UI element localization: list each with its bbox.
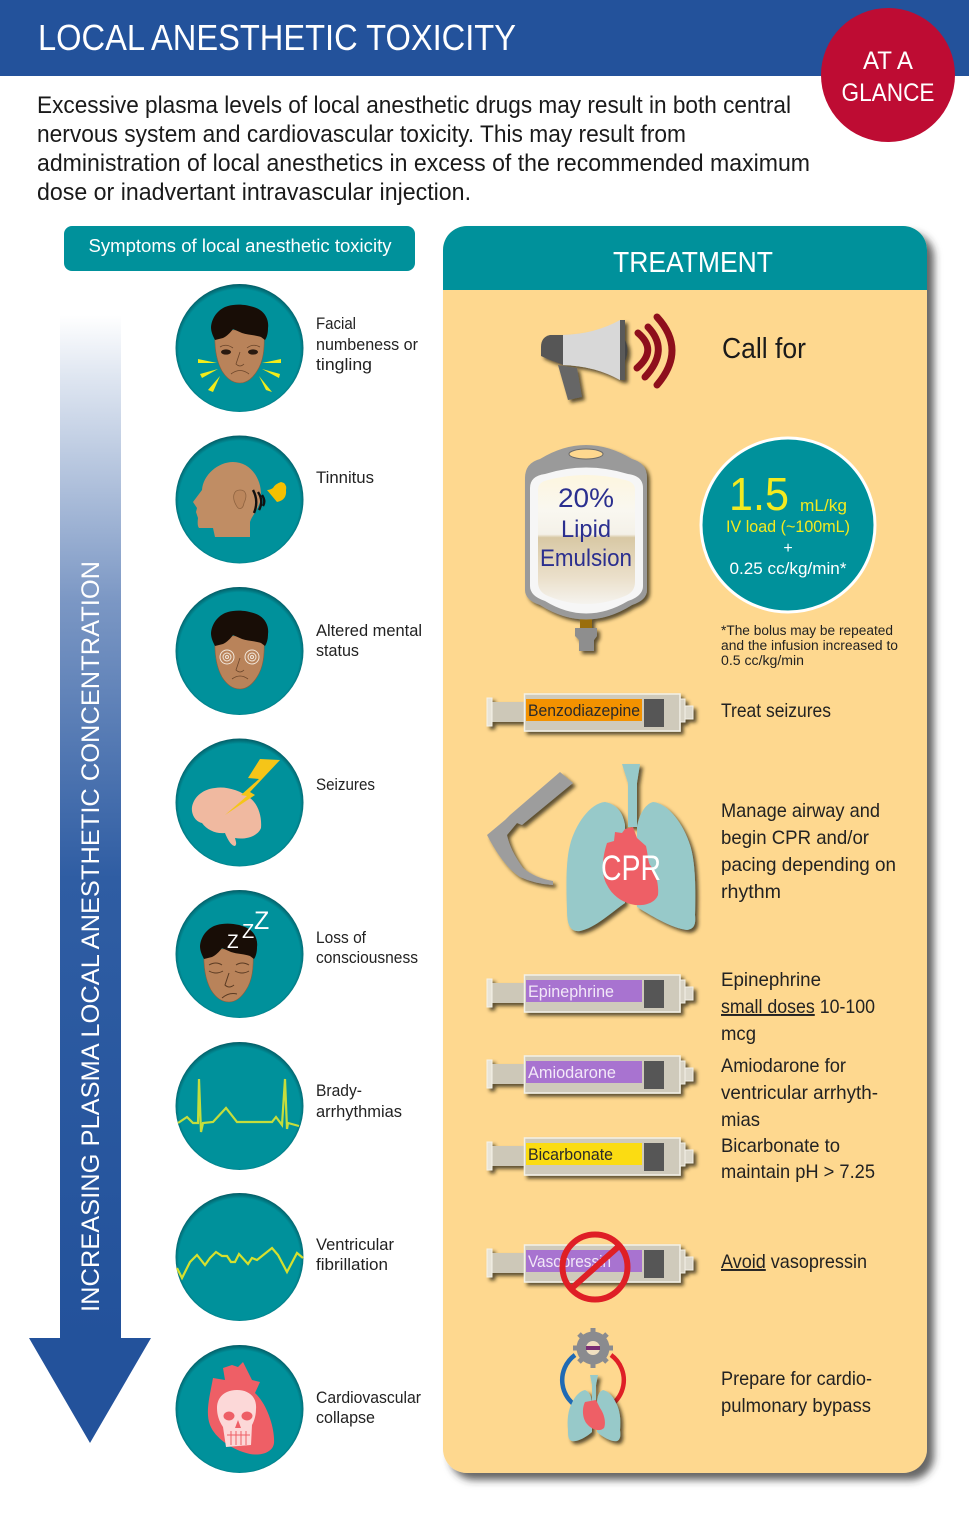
text: airway and CPR: pacing depending on [721, 854, 896, 876]
label: cardiovascular collapse [316, 1389, 421, 1427]
syringe: amiodarone: Amiodarone [528, 1063, 616, 1082]
text: airway and CPR: rhythm [721, 881, 781, 903]
syringe: epinephrine [487, 975, 693, 1012]
text: airway and CPR: begin CPR and/or [721, 827, 869, 849]
bag label: 20% [558, 483, 614, 513]
icon: head with ringing bell [193, 462, 286, 537]
text: epinephrine [721, 969, 875, 1045]
text: bicarbonate: maintain pH > 7.25 [721, 1161, 875, 1183]
callout: lipid dose: IV load (~100mL) [726, 517, 850, 536]
icon: z letters: Z [254, 907, 269, 935]
label: altered mental status: Altered mental [316, 622, 422, 640]
label: bradyarrhythmias: Brady- [316, 1082, 362, 1100]
text: epinephrine: mcg [721, 1023, 756, 1045]
symptom: cardiovascular collapse [176, 1345, 304, 1473]
badge: at a glance: AT A [863, 47, 913, 75]
text: bicarbonate [721, 1135, 875, 1183]
label: cardiovascular collapse: Cardiovascular [316, 1389, 421, 1407]
text: amiodarone: ventricular arrhyth- [721, 1082, 878, 1104]
callout: lipid dose: + [783, 540, 793, 557]
title: LOCAL ANESTHETIC TOXICITY [38, 17, 516, 58]
footnote: *The bolus may be repeated [721, 623, 893, 638]
text: bicarbonate: Bicarbonate to [721, 1135, 840, 1157]
label: tinnitus: Tinnitus [316, 469, 374, 487]
label: loss of consciousness [316, 929, 418, 967]
bag label: Lipid [561, 516, 611, 543]
syringe: epinephrine: Epinephrine [528, 982, 614, 1001]
bag label: Emulsion [540, 545, 632, 572]
syringe: vasopressin crossed out [487, 1234, 693, 1300]
arrow: increasing plasma concentration: INCREASING PLASMA LOCAL ANESTHETIC CONCENTRATION [77, 561, 105, 1312]
text: call for: Call for [722, 333, 806, 365]
icon: lungs with heart, CPR: CPR [601, 849, 661, 888]
label: facial numbness: Facial [316, 315, 356, 333]
label: ventricular fibrillation: fibrillation [316, 1256, 388, 1274]
icon: cardiopulmonary bypass [562, 1328, 624, 1441]
icon: z letters: Z [242, 921, 254, 943]
label: cardiovascular collapse: collapse [316, 1409, 375, 1427]
intro paragraph: nervous system and cardiovascular toxicity. This may result from [37, 121, 686, 148]
label: facial numbness [316, 315, 418, 374]
text: airway and CPR [721, 800, 896, 903]
footnote [721, 623, 898, 668]
label: seizures: Seizures [316, 776, 375, 794]
symptom: altered mental status [176, 587, 304, 715]
icon: laryngoscope [487, 772, 573, 885]
callout: lipid dose: 1.5 [729, 468, 789, 520]
label: ventricular fibrillation [316, 1236, 394, 1274]
syringe: amiodarone [487, 1056, 693, 1093]
text: bypass: pulmonary bypass [721, 1395, 871, 1417]
text: amiodarone: Amiodarone for [721, 1055, 846, 1077]
symptom: loss of consciousness [176, 890, 304, 1018]
symptom: seizures [176, 738, 304, 866]
intro paragraph [37, 92, 810, 206]
syringe: bicarbonate [487, 1138, 693, 1175]
label: facial numbness: tingling [316, 356, 372, 374]
treatment heading: TREATMENT [613, 247, 773, 279]
text: airway and CPR: Manage airway and [721, 800, 880, 822]
label: ventricular fibrillation: Ventricular [316, 1236, 394, 1254]
symptom: facial numbness [176, 284, 304, 412]
text: avoid vasopressin: Avoid vasopressin [721, 1251, 867, 1273]
symptom: ventricular fibrillation [176, 1193, 304, 1321]
label: loss of consciousness: Loss of [316, 929, 366, 947]
icon: face with spiral eyes [211, 611, 268, 689]
syringe: benzodiazepine: Benzodiazepine [528, 701, 640, 720]
text: amiodarone [721, 1055, 878, 1131]
label: bradyarrhythmias [316, 1082, 402, 1121]
text: amiodarone: mias [721, 1109, 760, 1131]
footnote: 0.5 cc/kg/min [721, 653, 804, 668]
footnote: and the infusion increased to [721, 638, 898, 653]
icon: sleeping face [200, 924, 257, 1002]
callout: lipid dose: 0.25 cc/kg/min* [730, 559, 847, 578]
icon: megaphone [541, 317, 672, 400]
callout: lipid dose [701, 438, 875, 612]
callout: lipid dose: mL/kg [800, 496, 847, 515]
icon: prohibition sign [562, 1234, 628, 1300]
icon: lungs with heart, CPR [566, 764, 695, 931]
text: bypass: Prepare for cardio- [721, 1368, 872, 1390]
intro paragraph: Excessive plasma levels of local anesthetic drugs may result in both central [37, 92, 791, 119]
badge: at a glance [821, 8, 955, 142]
text: bypass [721, 1368, 872, 1417]
badge: at a glance: GLANCE [842, 79, 934, 107]
intro paragraph: administration of local anesthetics in excess of the recommended maximum [37, 150, 810, 177]
header bar [0, 0, 969, 76]
treatment heading [443, 226, 927, 290]
label: altered mental status: status [316, 642, 359, 660]
icon: z letters [227, 907, 269, 953]
intro paragraph: dose or inadvertant intravascular injection. [37, 179, 471, 206]
arrow: increasing plasma concentration [29, 315, 151, 1443]
symptom: bradyarrhythmias [176, 1042, 304, 1170]
text: epinephrine: small doses 10-100 [721, 996, 875, 1018]
icon: gear [573, 1328, 613, 1368]
chart: fibrillation trace [177, 1248, 303, 1278]
icon: heart with skull [208, 1362, 274, 1455]
chart: slow ECG trace [178, 1079, 299, 1132]
icon: brain with lightning [192, 759, 280, 846]
icon: lipid emulsion bag [525, 445, 647, 651]
syringe: bicarbonate: Bicarbonate [528, 1145, 613, 1164]
label: altered mental status [316, 622, 422, 660]
text: treat seizures: Treat seizures [721, 700, 831, 722]
icon: face with tingling [198, 305, 281, 392]
panel: treatment [443, 226, 927, 1473]
bag label [540, 483, 632, 572]
symptoms heading: Symptoms of local anesthetic toxicity [88, 236, 392, 256]
syringe: vasopressin crossed out: Vasopressin [528, 1252, 611, 1271]
label: loss of consciousness: consciousness [316, 949, 418, 967]
label: bradyarrhythmias: arrhythmias [316, 1103, 402, 1121]
label: facial numbness: numbeness or [316, 336, 418, 354]
symptoms heading [64, 226, 415, 271]
text: epinephrine: Epinephrine [721, 969, 821, 991]
symptom: tinnitus [176, 436, 304, 564]
syringe: benzodiazepine [487, 694, 693, 731]
icon: z letters: Z [227, 932, 239, 953]
